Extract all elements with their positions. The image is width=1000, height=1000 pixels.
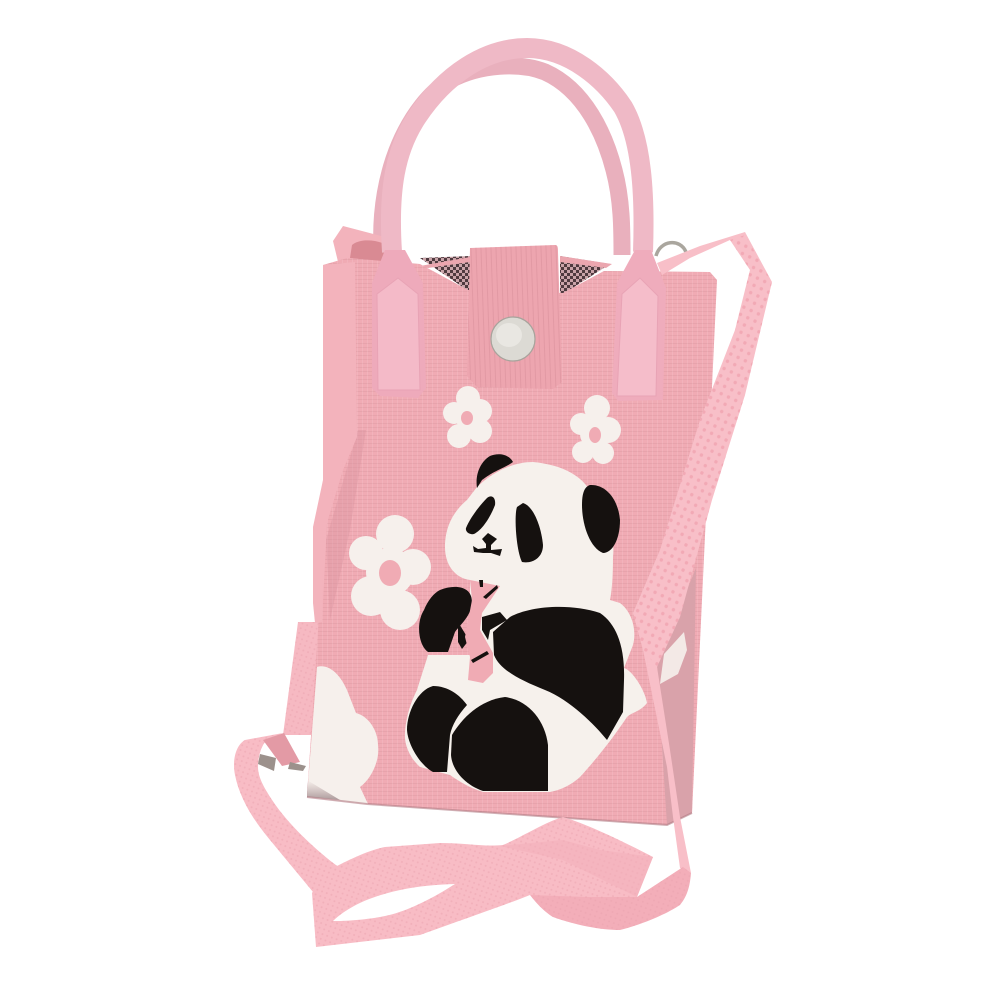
- panda: [405, 454, 647, 792]
- panda white body and head: [405, 462, 647, 792]
- flower: top right: [570, 395, 621, 464]
- bag body: [307, 258, 717, 825]
- bag shade beside strap: [326, 430, 366, 620]
- panda big arm: [493, 607, 624, 740]
- panda nose and mouth: [473, 533, 502, 556]
- bag side gusset: [657, 568, 696, 825]
- bag inner lining: [420, 256, 612, 296]
- flower: top centre: [443, 386, 492, 448]
- strap loop gap: [333, 884, 455, 921]
- bag front flap: [467, 245, 562, 389]
- flower: bottom left partial: [307, 666, 378, 804]
- crossbody strap: front folded loop: [312, 817, 653, 947]
- panda eye right: [516, 503, 543, 562]
- flower: left large: [349, 515, 431, 630]
- crossbody strap: long left run: [234, 733, 340, 892]
- crossbody strap: right side: [633, 232, 772, 873]
- back handle: [382, 66, 622, 255]
- crossbody strap: lower back band: [530, 867, 691, 930]
- strap: descending left below bag: [283, 622, 325, 735]
- strap buckle: [258, 754, 306, 771]
- bag bottom edge shadow: [307, 797, 692, 825]
- panda leg left: [407, 686, 467, 772]
- cub pink figure: [465, 580, 500, 683]
- panda ear left: [477, 454, 513, 488]
- metal ring: [656, 243, 686, 256]
- panda left paw: [419, 587, 472, 652]
- panda leg right: [451, 697, 548, 791]
- strap loop at top left: [333, 226, 386, 270]
- front handle: [391, 48, 644, 252]
- panda ear right: [582, 485, 620, 553]
- panda small right paw: [482, 612, 507, 640]
- handle leather tab right: [612, 250, 666, 401]
- snap button: [491, 317, 535, 361]
- strap overlay on bag left edge: [313, 262, 357, 623]
- handle leather tab left: [372, 250, 426, 398]
- panda eye left: [466, 496, 495, 534]
